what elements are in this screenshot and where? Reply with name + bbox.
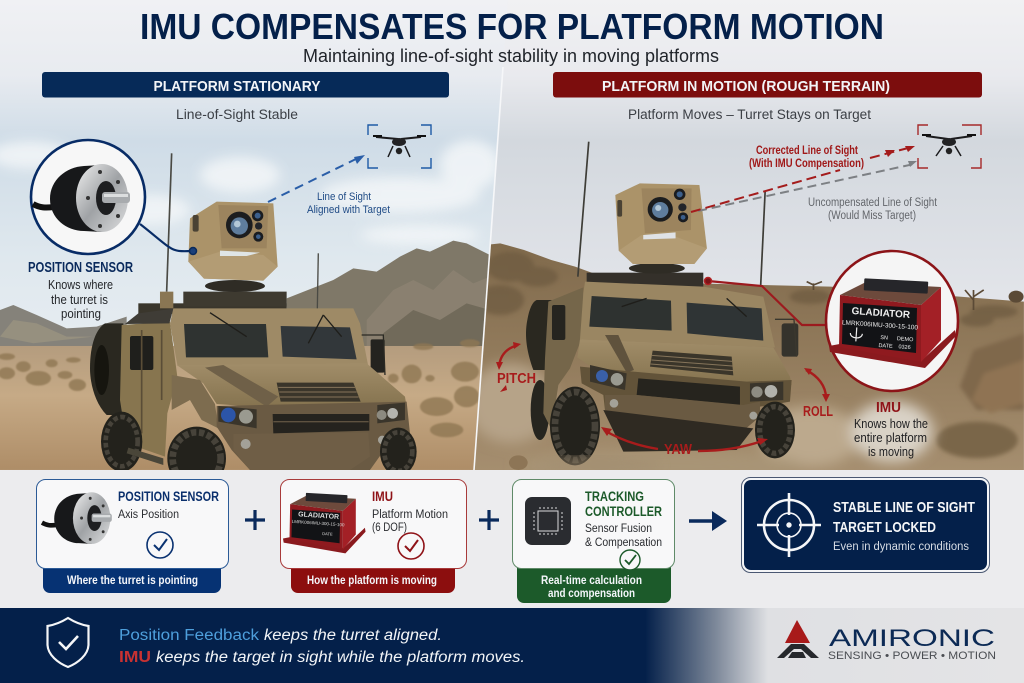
axis: pitch: [496, 342, 536, 392]
card: stable line of sight result: STABLE LINE OF SIGHT: [833, 499, 975, 516]
icon: check: [620, 550, 640, 570]
plus sign: [479, 510, 499, 530]
caption: line-of-sight stable: Line-of-Sight Stable: [176, 107, 298, 122]
callout line to IMU: [704, 278, 828, 325]
callout: IMU magnified: DATE: [878, 343, 893, 350]
card: tracking controller: Sensor Fusion: [585, 523, 652, 535]
icon: IMU unit: [283, 493, 366, 553]
callout: IMU magnified: DEMO: [897, 336, 914, 343]
caption: platform moves, turret stays on target: Platform Moves – Turret Stays on Target: [628, 107, 871, 122]
callout: IMU magnified: SN: [880, 335, 888, 342]
card: position sensor: [36, 480, 228, 593]
logo mark: [777, 620, 819, 658]
plus sign: [245, 510, 265, 530]
heading: platform stationary: PLATFORM STATIONARY: [154, 78, 320, 95]
heading: platform stationary: [42, 72, 449, 98]
callout: IMU magnified: 0326: [898, 344, 911, 351]
icon: check: [398, 533, 424, 559]
arrow: uncompensated line of sight: [698, 161, 917, 211]
footer message: keeps the turret aligned.: [264, 627, 442, 644]
label: uncompensated line of sight: Uncompensated Line of Sight: [808, 197, 938, 209]
label: IMU: [854, 399, 928, 459]
icon: drone target right: [918, 125, 981, 168]
axis: roll: ROLL: [803, 404, 833, 420]
icon: check: [147, 532, 173, 558]
panel: platform stationary scene: [0, 86, 500, 470]
footer message: IMU: [119, 649, 151, 666]
card: tracking controller: Real-time calculation: [541, 575, 642, 587]
vehicle: stationary platform with turret: [90, 153, 417, 490]
icon: drone target left: [368, 125, 431, 168]
card: tracking controller: CONTROLLER: [585, 504, 662, 519]
footer message: Position Feedback: [119, 627, 259, 644]
card: position sensor: POSITION SENSOR: [118, 489, 219, 504]
card: stable line of sight result: [742, 478, 990, 572]
arrow: line of sight aligned: [268, 155, 365, 202]
footer message: keeps the target in sight while the platform moves.: [156, 649, 525, 666]
card: tracking controller: & Compensation: [585, 537, 662, 549]
label: IMU: Knows how the: [854, 417, 928, 431]
card: position sensor: Axis Position: [118, 509, 179, 521]
label: corrected line of sight: [749, 145, 864, 170]
label: line of sight aligned: Aligned with Target: [307, 204, 390, 216]
label: position sensor: POSITION SENSOR: [28, 259, 133, 276]
label: line of sight aligned: [307, 191, 390, 216]
icon: processor chip: [525, 497, 571, 545]
card: IMU: IMU: [372, 489, 393, 504]
card: tracking controller: TRACKING: [585, 489, 644, 504]
footer message: [119, 627, 525, 666]
title: IMU COMPENSATES FOR PLATFORM MOTION: [140, 6, 884, 47]
icon: shield check: [48, 618, 88, 667]
icon: encoder: [42, 492, 112, 544]
card: IMU: GLADIATOR: [298, 511, 339, 521]
subtitle: Maintaining line-of-sight stability in moving platforms: [303, 46, 719, 66]
axis: pitch: PITCH: [497, 371, 536, 387]
card: stable line of sight result: Even in dynamic conditions: [833, 541, 969, 553]
card: tracking controller: and compensation: [548, 588, 635, 600]
heading: platform in motion: PLATFORM IN MOTION (ROUGH TERRAIN): [602, 78, 890, 95]
label: IMU: is moving: [868, 445, 914, 459]
icon: target crosshair: [757, 493, 821, 557]
arrow: corrected line of sight: [691, 146, 915, 212]
icon: IMU unit: [829, 278, 956, 368]
card: IMU: DATE: [322, 531, 333, 537]
card: IMU: (6 DOF): [372, 522, 407, 534]
label: corrected line of sight: (With IMU Compensation): [749, 158, 864, 170]
card: IMU: How the platform is moving: [307, 575, 437, 587]
callout: IMU magnified: [826, 251, 958, 391]
callout: position sensor magnified: [31, 140, 145, 254]
label: uncompensated line of sight: (Would Miss Target): [828, 210, 916, 222]
axis: yaw: [601, 427, 768, 458]
axis: roll: [803, 368, 833, 420]
card: position sensor: Where the turret is pointing: [67, 575, 198, 587]
callout: IMU magnified: GLADIATOR: [851, 306, 911, 321]
callout line to turret: [140, 224, 196, 254]
label: position sensor: pointing: [61, 307, 101, 321]
card: stable line of sight result: TARGET LOCKED: [833, 519, 936, 536]
label: position sensor: the turret is: [51, 293, 108, 307]
axis: yaw: YAW: [664, 442, 692, 458]
panel: footer band: [0, 608, 1024, 683]
label: IMU: entire platform: [854, 431, 927, 445]
label: uncompensated line of sight: [808, 197, 938, 222]
label: line of sight aligned: Line of Sight: [317, 191, 371, 203]
card: tracking controller: [512, 480, 674, 603]
vehicle: moving platform with turret: [509, 142, 798, 473]
logo: Amironic: AMIRONIC: [829, 625, 995, 652]
logo: Amironic: [777, 620, 996, 662]
label: position sensor: Knows where: [48, 278, 113, 292]
panel: bottom band: [0, 470, 1024, 608]
card: IMU: [280, 480, 466, 593]
label: corrected line of sight: Corrected Line of Sight: [756, 145, 858, 157]
label: position sensor: [28, 259, 133, 321]
label: IMU: IMU: [876, 399, 901, 416]
arrow to result: [689, 511, 727, 531]
callout: IMU magnified: LMRK006IMU-300-15-100: [842, 319, 919, 332]
logo: Amironic: SENSING • POWER • MOTION: [828, 650, 996, 662]
card: IMU: Platform Motion: [372, 509, 448, 521]
panel: platform in motion scene: [474, 90, 1024, 470]
icon: position sensor encoder: [33, 164, 130, 232]
card: IMU: LMRK006IMU-300-15-100: [292, 519, 345, 527]
divider between scenes: [474, 67, 503, 470]
heading: platform in motion: [553, 72, 982, 98]
